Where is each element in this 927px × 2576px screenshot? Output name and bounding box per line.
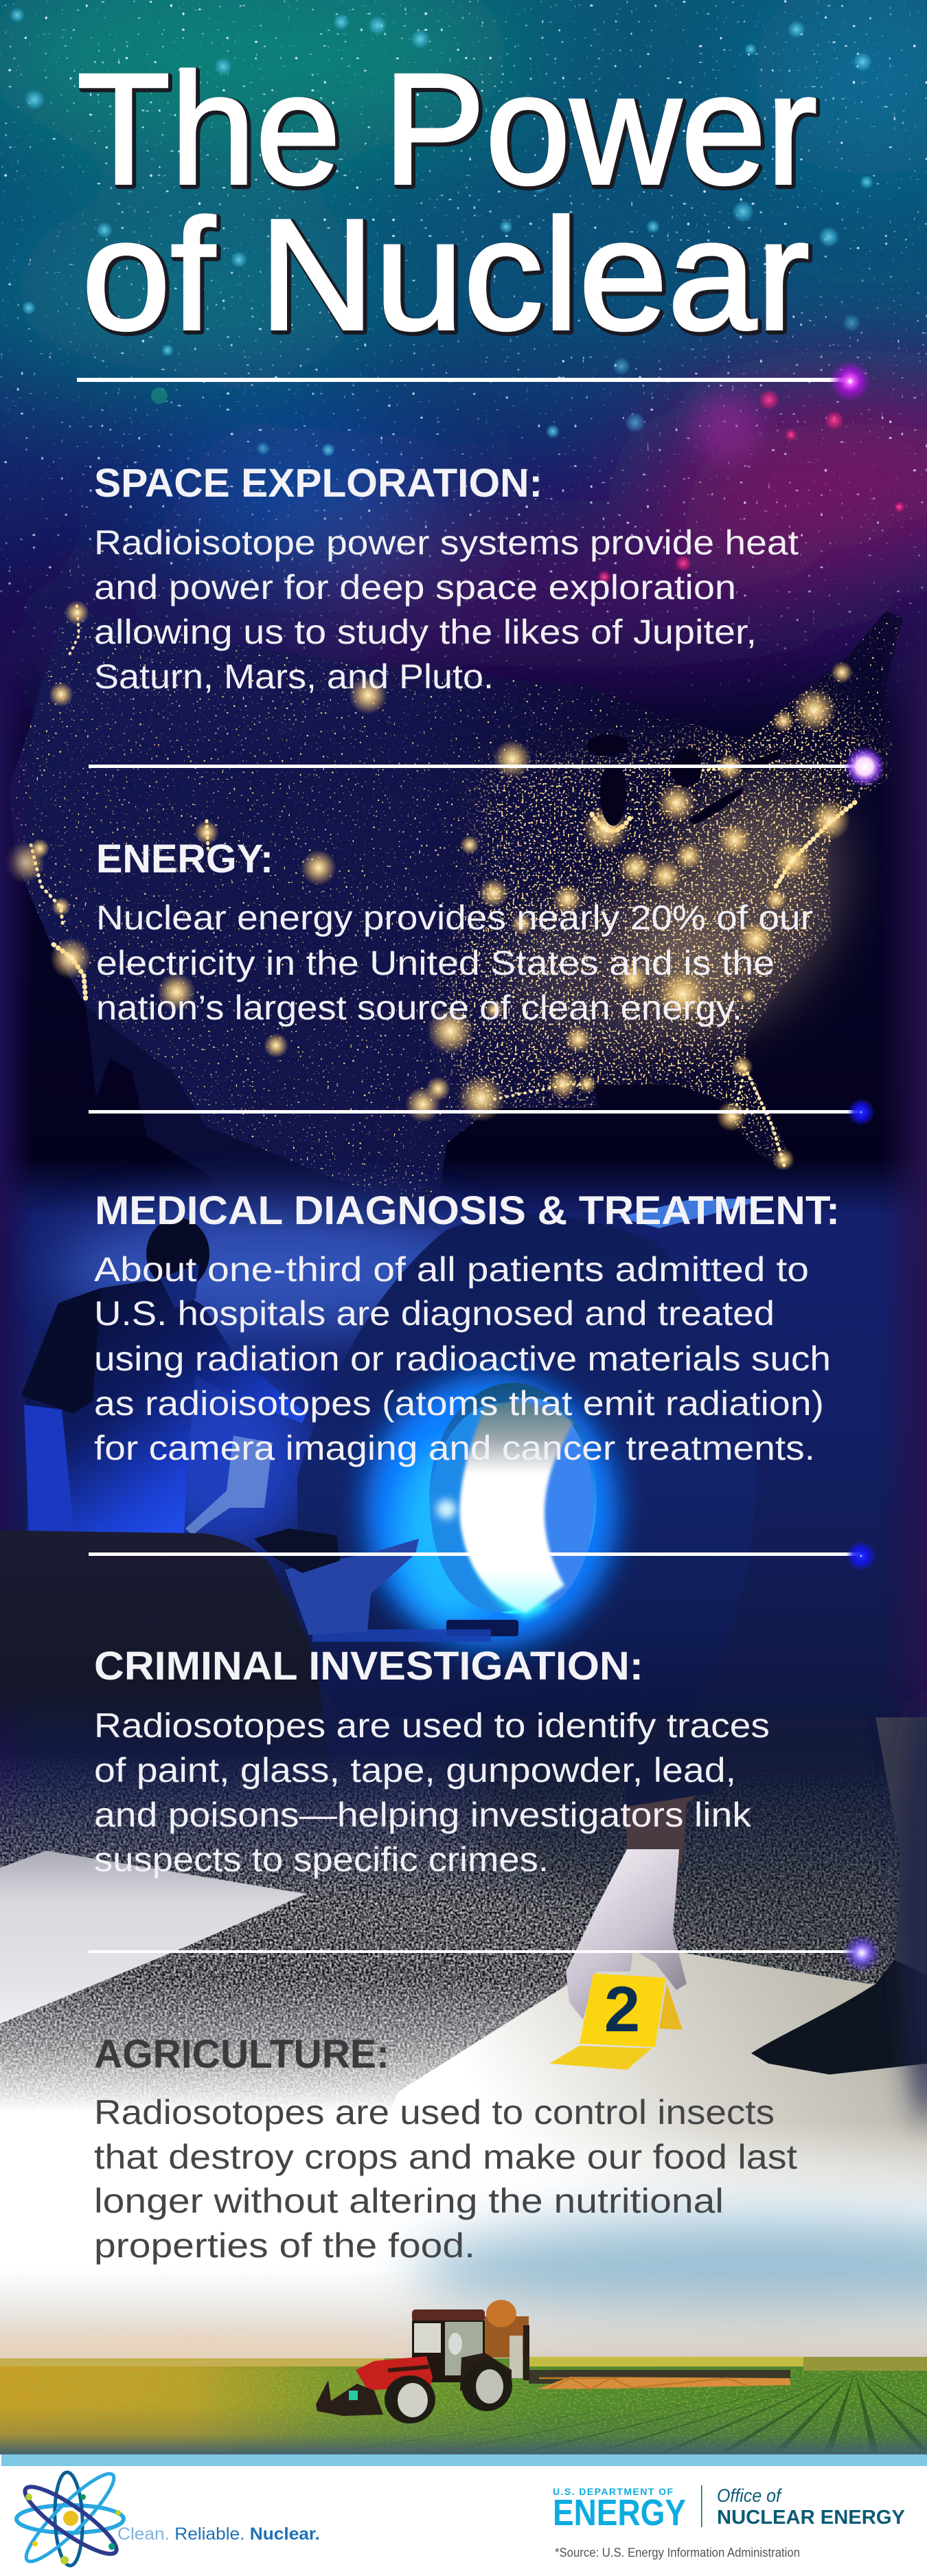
- text: space exploration body: and power for deep space exploration: [94, 568, 736, 607]
- text: agriculture body: that destroy crops and make our food last: [94, 2138, 797, 2176]
- right road paint: [392, 1953, 927, 2202]
- text: space exploration body: Radioisotope power systems provide heat: [94, 523, 799, 562]
- blanket: [0, 1530, 330, 1772]
- technician: [21, 1218, 306, 1533]
- text: medical body: as radioisotopes (atoms that emit radiation): [94, 1384, 824, 1423]
- heading: energy: ENERGY:: [96, 837, 273, 881]
- evidence marker number 2: [549, 1973, 683, 2070]
- panel: space exploration: [94, 461, 799, 696]
- title: The Power: [79, 43, 819, 219]
- vignette: [0, 591, 927, 1779]
- text: agriculture body: longer without altering the nutritional: [94, 2182, 724, 2220]
- logo: Office of Nuclear Energy: Office of: [717, 2485, 782, 2506]
- text: space exploration body: [94, 523, 799, 696]
- tractor: [316, 2300, 791, 2424]
- title: of Nuclear: [82, 186, 810, 363]
- text: medical body: using radiation or radioactive materials such: [94, 1340, 831, 1378]
- evidence marker number 2: 2: [604, 1973, 640, 2045]
- panel: medical diagnosis and treatment: [94, 1188, 840, 1467]
- text: energy body: nation’s largest source of clean energy.: [96, 988, 742, 1027]
- footer: [0, 2454, 927, 2576]
- panel: agriculture: [94, 2032, 797, 2265]
- text: criminal body: suspects to specific crimes.: [94, 1840, 549, 1879]
- title: The Power: [77, 41, 817, 217]
- great lakes: [587, 734, 783, 826]
- title: [77, 41, 819, 365]
- text: criminal body: and poisons—helping investigators link: [94, 1796, 752, 1834]
- text: energy body: electricity in the United States and is the: [96, 944, 775, 982]
- heading: space exploration: SPACE EXPLORATION:: [94, 461, 542, 506]
- bokeh stars: [10, 8, 905, 584]
- heading: agriculture: AGRICULTURE:: [94, 2032, 389, 2077]
- text: criminal body: Radiosotopes are used to identify traces: [94, 1706, 770, 1745]
- text: medical body: U.S. hospitals are diagnosed and treated: [94, 1294, 775, 1333]
- city glows: [3, 600, 884, 1171]
- heading: criminal investigation: CRIMINAL INVESTIGATION:: [94, 1644, 643, 1688]
- icon: atom logo: [16, 2465, 124, 2570]
- logo: U.S. Department of Energy: U.S. DEPARTMENT OF: [553, 2486, 673, 2497]
- source note: *Source: U.S. Energy Information Administration: [555, 2546, 800, 2560]
- starfield: [0, 0, 927, 769]
- photo: medical scanner and technician: [0, 1199, 769, 1772]
- text: energy body: [96, 899, 813, 1027]
- text: agriculture body: properties of the food.: [94, 2226, 475, 2265]
- divider 3 with blue glow: [89, 1098, 875, 1126]
- arm and glove: [566, 1738, 714, 2020]
- text: medical body: [94, 1250, 831, 1467]
- text: energy body: Nuclear energy provides nearly 20% of our: [96, 899, 813, 937]
- photo: crop field: [0, 2357, 927, 2454]
- text: criminal body: of paint, glass, tape, gunpowder, lead,: [94, 1751, 736, 1789]
- US night map: [0, 591, 927, 1230]
- panel: criminal investigation: [94, 1644, 770, 1879]
- text: criminal body: [94, 1706, 770, 1879]
- text: medical body: for camera imaging and cancer treatments.: [94, 1429, 815, 1467]
- scanner ring: [429, 1383, 597, 1618]
- text: agriculture body: [94, 2093, 797, 2265]
- text: medical body: About one-third of all patients admitted to: [94, 1250, 809, 1289]
- logo: Office of Nuclear Energy: NUCLEAR ENERGY: [717, 2507, 905, 2529]
- sky: [0, 2215, 927, 2366]
- logo: U.S. Department of Energy: ENERGY: [553, 2492, 686, 2533]
- panel: energy: [96, 837, 813, 1027]
- shoe: [751, 1960, 927, 2075]
- tagline: Clean. Reliable. Nuclear.: [117, 2524, 320, 2544]
- left road paint: [0, 1851, 306, 2024]
- text: space exploration body: Saturn, Mars, and Pluto.: [94, 657, 494, 696]
- divider 2 with white-purple glow: [89, 746, 885, 787]
- trouser leg: [876, 1717, 927, 1978]
- divider 4 with blue glow: [89, 1541, 876, 1571]
- logo: Office of Nuclear Energy: [717, 2485, 905, 2529]
- handheld scanner: [185, 1436, 273, 1535]
- blue footer bar: [1, 2454, 927, 2466]
- text: space exploration body: allowing us to study the likes of Jupiter,: [94, 613, 757, 651]
- title: of Nuclear: [84, 188, 812, 365]
- divider 1 with magenta glow: [77, 361, 871, 402]
- machine body: [297, 1214, 756, 1717]
- divider 5 with violet glow: [89, 1934, 881, 1972]
- patient: [254, 1528, 419, 1635]
- text: agriculture body: Radiosotopes are used to control insects: [94, 2093, 775, 2132]
- photo: crime scene pavement: [0, 1676, 927, 2366]
- heading: medical: MEDICAL DIAGNOSIS & TREATMENT:: [95, 1188, 840, 1233]
